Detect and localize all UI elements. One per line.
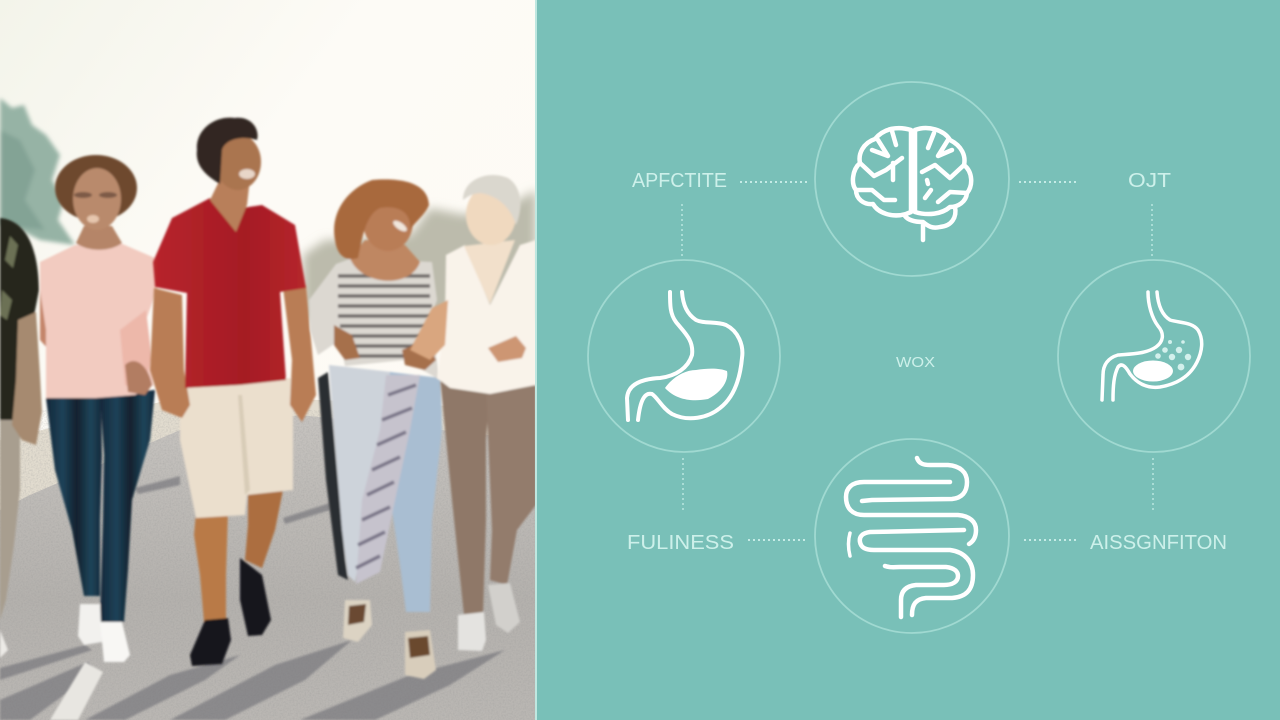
sidewalk xyxy=(0,400,488,510)
light edge between photo and panel xyxy=(535,0,537,720)
person: woman in hat and striped top xyxy=(309,179,442,679)
diagram: central hub cycle xyxy=(588,82,1250,633)
label: appetite: APFCTITE xyxy=(632,170,727,192)
panel: teal diagram background xyxy=(536,0,1280,720)
road xyxy=(0,415,536,720)
icon: stomach with particles in circle xyxy=(1058,260,1250,452)
connector: brain to gut xyxy=(1019,181,1079,183)
connector: fullness to intestine xyxy=(748,539,808,541)
person: man in red shirt xyxy=(150,118,316,666)
label: center: WOX xyxy=(896,354,935,371)
connector: right stomach to absorption xyxy=(1152,458,1154,512)
road marking xyxy=(50,662,103,720)
person: woman in pink top xyxy=(40,155,157,662)
label: absorption: AISSGNFITON xyxy=(1090,532,1227,554)
road shadows xyxy=(0,476,505,720)
person: left edge man xyxy=(0,218,42,658)
distant hills xyxy=(303,190,536,320)
connector: appetite to left stomach xyxy=(681,204,683,256)
icon: intestine in circle xyxy=(815,439,1009,633)
icon: stomach with food in circle xyxy=(588,260,780,452)
icon: brain in circle xyxy=(815,82,1009,276)
label: gut: OJT xyxy=(1128,170,1171,192)
connector: appetite to brain xyxy=(740,181,807,183)
connector: gut to right stomach xyxy=(1151,204,1153,256)
connector: intestine to absorption xyxy=(1024,539,1079,541)
connector: left stomach to fullness xyxy=(682,458,684,512)
label: fullness: FULINESS xyxy=(627,532,734,554)
panel: photo of friends walking xyxy=(0,0,536,720)
tree xyxy=(0,98,75,245)
person: woman in white top xyxy=(410,175,536,651)
